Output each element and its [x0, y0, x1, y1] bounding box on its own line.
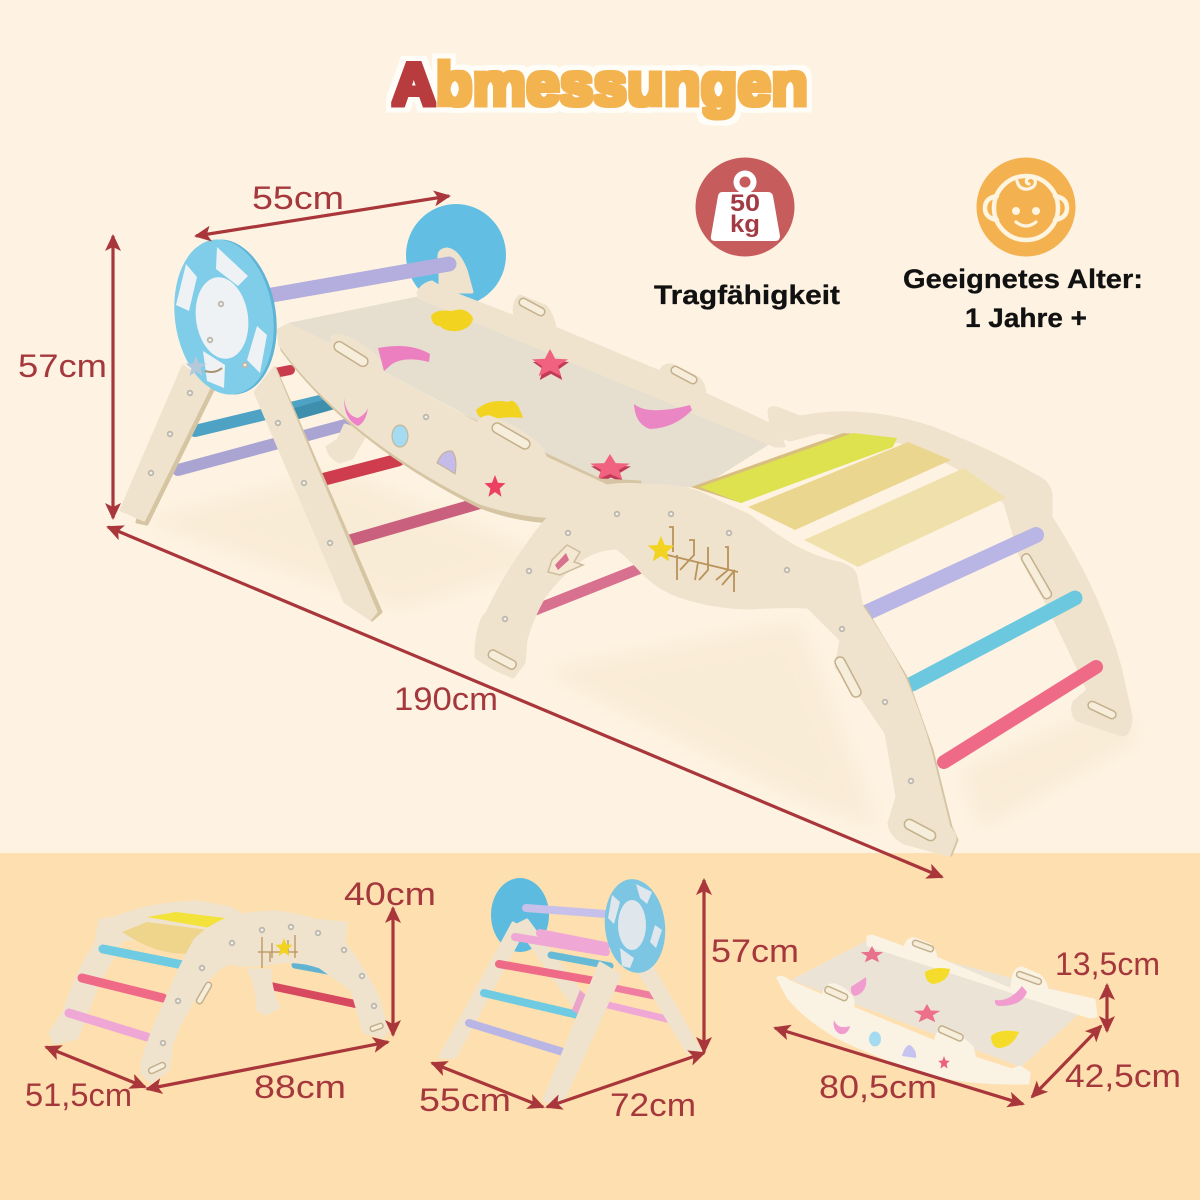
- pink rung behind arch: [535, 568, 641, 610]
- icon: baby face: [976, 158, 1076, 256]
- small view: arch length arrow: [147, 1042, 388, 1089]
- dimension label: 72cm: 72cm: [610, 1087, 696, 1123]
- small view: arch depth arrow: [46, 1047, 145, 1087]
- main product: soft floor shadows: [140, 470, 1140, 830]
- small view: triangle length arrow: [547, 1053, 704, 1107]
- front board with cut-outs: [778, 977, 1029, 1083]
- ramp foot behind: [327, 425, 367, 462]
- foot slot far side: [1087, 700, 1117, 720]
- arch front side board: [476, 484, 957, 855]
- icon: weight capacity: [696, 158, 794, 256]
- front-right A-frame leg: [255, 368, 381, 620]
- dimension: main height arrow: [111, 236, 115, 518]
- main product: triangle climber and ramp: [121, 204, 784, 620]
- front arc with busy board: [142, 912, 387, 1082]
- front legs: [544, 963, 620, 1107]
- label: suitable age: Geeignetes Alter:: [903, 264, 1143, 294]
- dimension label: small 57cm: 57cm: [711, 933, 799, 969]
- ramp far rail with handles: [418, 282, 784, 446]
- arch far side: [769, 408, 1131, 735]
- far foot: [249, 970, 279, 1014]
- back blue disc: [406, 204, 506, 306]
- small view: ramp length arrow: [775, 1028, 1023, 1104]
- far rail and handles: [868, 936, 1096, 1017]
- small view: ramp width arrow: [1032, 1026, 1101, 1097]
- dimension label: 40cm: 40cm: [344, 876, 436, 912]
- title: Abmessungen: [392, 51, 808, 118]
- ramp holds: [378, 310, 692, 483]
- dimension label: 55cm: 55cm: [252, 180, 344, 216]
- rungs: [69, 949, 360, 1037]
- main product: rainbow arch: [476, 408, 1131, 855]
- small view: triangle depth arrow: [432, 1063, 543, 1107]
- ramp climbing surface: [288, 296, 776, 488]
- rungs: purple, blue, red: [868, 535, 1096, 762]
- top rung: [272, 264, 449, 295]
- ramp surface: [791, 940, 1094, 1067]
- small view: triangle climber: [440, 876, 701, 1107]
- dimension label: small 55cm: 55cm: [419, 1082, 511, 1118]
- rungs behind the ramp: [178, 370, 480, 541]
- front blue disc with white panels: [165, 233, 286, 401]
- label: suitable age: 1 Jahre +: [965, 303, 1087, 333]
- small view: ramp height arrow: [1105, 985, 1109, 1031]
- ramp front side board with cut-outs: [278, 325, 640, 522]
- front-left A-frame leg: [121, 366, 214, 524]
- front disc: [600, 876, 670, 976]
- coloured slats: [691, 433, 1006, 567]
- dimension label: 88cm: 88cm: [254, 1069, 346, 1105]
- dimension: main depth arrow: [196, 196, 449, 236]
- background: upper cream panel: [0, 0, 1200, 853]
- far arc: [50, 902, 239, 1043]
- rungs: [469, 908, 671, 1052]
- small view: arch: [50, 902, 387, 1082]
- dimension label: 190cm: 190cm: [394, 681, 498, 717]
- back disc: [491, 878, 549, 952]
- holds: [851, 946, 1027, 1048]
- dimension label: 13,5cm: 13,5cm: [1055, 946, 1160, 982]
- slats: [147, 912, 241, 930]
- small view: triangle height arrow: [702, 880, 706, 1052]
- dimension: main length arrow: [108, 527, 942, 877]
- far side hand slot: [1020, 552, 1053, 600]
- back legs: [440, 923, 524, 1057]
- label: suitable age: [903, 264, 1143, 333]
- dimension label: 42,5cm: 42,5cm: [1065, 1058, 1181, 1094]
- dimension label: 57cm: 57cm: [18, 348, 107, 384]
- dimension label: 80,5cm: 80,5cm: [819, 1069, 937, 1105]
- icon: weight capacity: kg: [730, 211, 760, 238]
- ramp edge cue: [572, 990, 592, 1018]
- label: load capacity: Tragfähigkeit: [654, 280, 840, 310]
- icon: weight capacity: 50: [730, 190, 760, 217]
- small view: ramp: [778, 936, 1096, 1083]
- background: lower peach panel: [0, 853, 1200, 1200]
- dimension label: 51,5cm: 51,5cm: [25, 1077, 132, 1113]
- small view: arch height arrow: [391, 908, 395, 1035]
